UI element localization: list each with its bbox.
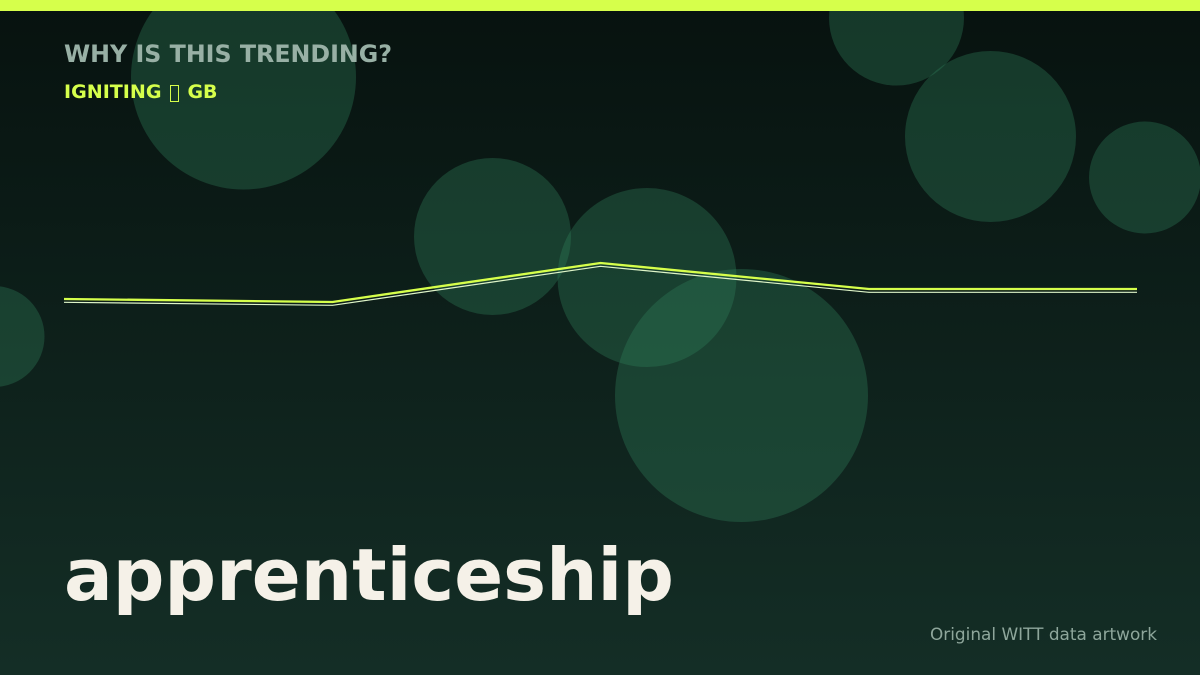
trend line chart	[64, 263, 1137, 305]
trend line: lime	[64, 263, 1137, 302]
trend line: pale offset	[64, 266, 1137, 305]
status label	[64, 81, 218, 103]
footer credit: Original WITT data artwork	[930, 625, 1157, 645]
main title: apprenticeship	[64, 533, 674, 617]
top accent bar	[0, 0, 1200, 11]
status label: GB	[188, 81, 218, 103]
eyebrow heading: WHY IS THIS TRENDING?	[64, 40, 392, 68]
decorative bubble cluster	[0, 0, 1200, 522]
status label: IGNITING	[64, 81, 162, 103]
